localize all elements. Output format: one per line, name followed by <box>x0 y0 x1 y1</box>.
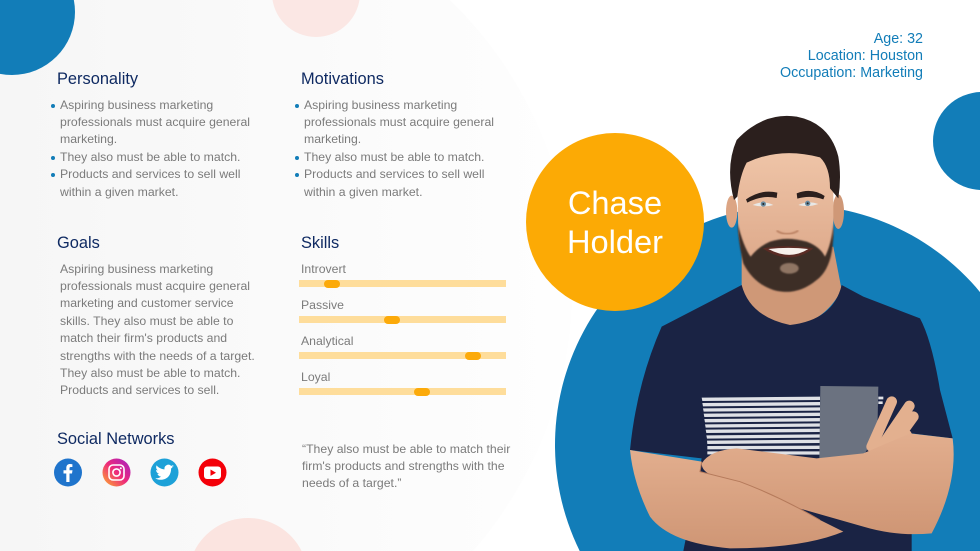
name badge <box>526 133 704 311</box>
text: demographics: Age: 32 <box>874 31 923 47</box>
heading: social networks: Social Networks <box>57 430 175 448</box>
heading: goals: Goals <box>57 234 100 252</box>
text: personality bullets <box>51 98 250 199</box>
skill label: analytical: Analytical <box>301 334 353 348</box>
text: goals <box>60 262 255 397</box>
text: personality bullets: professionals must acquire general <box>60 115 250 129</box>
icon: twitter <box>150 458 178 486</box>
text: motivations bullets <box>295 98 494 199</box>
text: motivations bullets: marketing. <box>304 132 361 146</box>
hair <box>730 116 840 200</box>
text: motivations bullets: professionals must acquire general <box>304 115 494 129</box>
social icons <box>54 458 226 486</box>
neck <box>742 247 842 327</box>
text: personality bullets: within a given market. <box>60 185 178 199</box>
text: goals: They also must be able to match. <box>60 366 240 380</box>
text: motivations bullets: Aspiring business marketing <box>304 98 457 112</box>
skill label: passive: Passive <box>301 298 344 312</box>
text: motivations bullets: within a given market. <box>304 185 422 199</box>
name text: Holder <box>567 223 663 260</box>
text: quote: needs of a target.” <box>302 476 401 490</box>
teeth <box>768 248 808 255</box>
heading: skills: Skills <box>301 234 339 252</box>
shirt stripes <box>702 397 883 455</box>
name text: Chase <box>568 184 662 221</box>
face <box>737 150 833 292</box>
text: personality bullets: marketing. <box>60 132 117 146</box>
mouth <box>763 246 813 258</box>
eyes <box>753 202 773 206</box>
text: personality bullets: Products and services to sell well <box>60 167 240 181</box>
heading: motivations: Motivations <box>301 70 384 88</box>
right arm <box>702 433 954 534</box>
icon: instagram <box>102 458 130 486</box>
skill label: introvert: Introvert <box>301 262 346 276</box>
skill bar: loyal <box>299 388 506 395</box>
chin skin <box>780 263 799 274</box>
left arm <box>630 450 843 548</box>
text: demographics: Occupation: Marketing <box>780 65 923 81</box>
nose <box>777 231 798 234</box>
text: demographics: Location: Houston <box>808 48 923 64</box>
skill label: loyal: Loyal <box>301 370 330 384</box>
icon: youtube <box>198 458 226 486</box>
beard <box>738 223 833 292</box>
text: quote: “They also must be able to match their <box>302 442 510 456</box>
icon: facebook <box>54 458 82 486</box>
text: goals: match their firm's products and <box>60 331 227 345</box>
text: goals: strengths with the needs of a target. <box>60 349 255 363</box>
text: goals: professionals must acquire general <box>60 279 250 293</box>
text: personality bullets: They also must be able to match. <box>60 150 240 164</box>
text: motivations bullets: Products and services to sell well <box>304 167 484 181</box>
photo: man with crossed arms <box>630 116 954 551</box>
shirt pocket <box>819 386 878 458</box>
text: personality bullets: Aspiring business marketing <box>60 98 213 112</box>
text: demographics <box>780 31 923 81</box>
text: goals: marketing and customer service <box>60 296 234 310</box>
name text <box>567 184 663 260</box>
skill bar: analytical <box>299 352 506 359</box>
fingers <box>872 402 913 447</box>
heading: personality: Personality <box>57 70 138 88</box>
text: goals: Aspiring business marketing <box>60 262 213 276</box>
text: motivations bullets: They also must be able to match. <box>304 150 484 164</box>
text: quote: firm's products and strengths with the <box>302 459 505 473</box>
text: goals: skills. They also must be able to <box>60 314 233 328</box>
ears <box>726 196 737 228</box>
brows <box>746 192 777 203</box>
skill bar: passive <box>299 316 506 323</box>
head group <box>726 116 844 292</box>
skill bar: introvert <box>299 280 506 287</box>
t-shirt <box>630 285 953 551</box>
text: goals: Products and services to sell. <box>60 383 219 397</box>
text: quote <box>302 442 510 490</box>
